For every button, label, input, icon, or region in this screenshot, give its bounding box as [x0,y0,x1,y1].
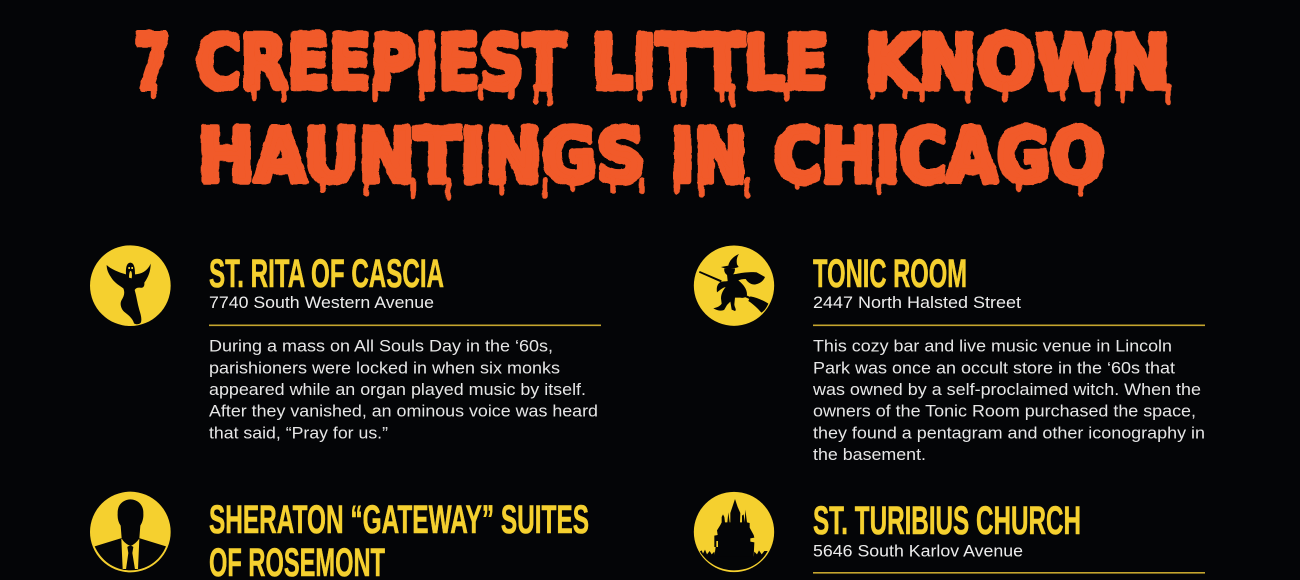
heading: ST. RITA OF CASCIA [209,252,444,296]
description: This cozy bar and live music venue in Lincoln [813,338,1172,356]
description: that said, “Pray for us.” [209,424,388,442]
title: HAUNTINGS [198,114,645,200]
panel: Sheraton Gateway Suites of Rosemont [90,492,589,580]
panel: St. Turibius Church [694,492,1205,574]
title: CREEPIEST [196,20,565,106]
description: During a mass on All Souls Day in the ‘60s, [209,338,553,356]
description: the basement. [813,446,926,464]
description: After they vanished, an ominous voice was heard [209,403,598,421]
heading: TONIC ROOM [813,252,967,296]
description: Park was once an occult store in the ‘60s that [813,359,1175,377]
title: CHICAGO [774,114,1105,200]
description: appeared while an organ played music by itself. [209,381,586,399]
panel: St. Rita of Cascia [90,245,601,442]
title: IN [671,114,747,200]
title: LITTLE [592,20,828,106]
description [812,338,1205,464]
icon: witch on broomstick [694,245,774,326]
icon: ghost [90,245,171,326]
description: parishioners were locked in when six monks [209,359,560,377]
description: owners of the Tonic Room purchased the space, [813,403,1196,421]
panel: Tonic Room [694,245,1205,464]
icon: haunted castle [694,492,774,572]
description: they found a pentagram and other iconography in [813,424,1205,442]
address: 7740 South Western Avenue [209,294,434,312]
title: KNOWN [865,20,1170,106]
description [209,338,598,442]
heading: ST. TURIBIUS CHURCH [813,499,1081,543]
address: 2447 North Halsted Street [813,294,1021,312]
icon: man in suit [90,492,171,572]
title [134,20,1170,200]
description: was owned by a self-proclaimed witch. When the [812,381,1201,399]
title: 7 [134,20,170,106]
heading [209,498,589,580]
address: 5646 South Karlov Avenue [813,542,1023,560]
heading: SHERATON “GATEWAY” SUITES [209,498,589,542]
